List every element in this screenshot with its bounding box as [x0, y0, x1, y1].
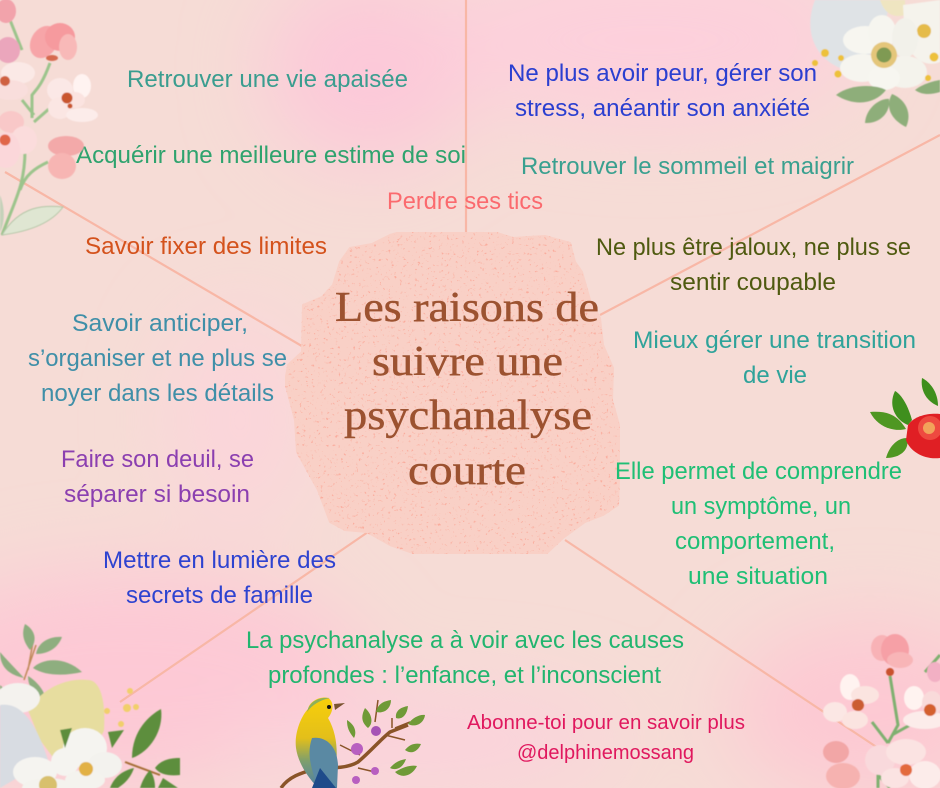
reason: deuil: séparer si besoin	[64, 481, 250, 508]
title: Les raisons de	[335, 285, 599, 331]
reason: comprendre un symptôme	[615, 458, 902, 590]
central speckled blob	[285, 232, 620, 554]
reason: sommeil: Retrouver le sommeil et maigrir	[521, 153, 854, 180]
reason: anticiper: noyer dans les détails	[41, 380, 274, 407]
icon: stones and white flowers top-right	[810, 0, 940, 127]
reason: secrets de famille	[103, 547, 336, 609]
reason: jalousie: sentir coupable	[670, 269, 836, 296]
reason: jalousie: Ne plus être jaloux, ne plus se	[596, 234, 911, 261]
reason: peur, stress, anxiété: Ne plus avoir peur, gérer son	[508, 60, 817, 87]
reason: causes profondes: La psychanalyse a à voir avec les causes	[246, 627, 684, 654]
reason: comprendre un symptôme: Elle permet de comprendre	[615, 458, 902, 485]
call to action: Abonne-toi pour en savoir plus	[467, 712, 745, 734]
reason: peur, stress, anxiété: stress, anéantir son anxiété	[515, 95, 810, 122]
reason: transition de vie: Mieux gérer une transition	[633, 327, 916, 354]
reason: limites: Savoir fixer des limites	[85, 233, 327, 260]
icon: pink blossoms top-left	[0, 0, 98, 235]
icon: stones and white flowers bottom-left	[0, 624, 180, 788]
title: psychanalyse	[344, 393, 592, 439]
icon: yellow bird on branch	[281, 697, 425, 788]
icon: red rose right	[870, 378, 940, 458]
reason: causes profondes: profondes : l’enfance, et l’inconscient	[268, 662, 661, 689]
icon: pink blossoms bottom-right	[823, 634, 940, 788]
call to action	[467, 712, 745, 764]
reason: secrets de famille: secrets de famille	[126, 582, 313, 609]
reason: estime de soi: Acquérir une meilleure estime de soi	[76, 142, 466, 169]
title	[335, 285, 599, 494]
reason: vie apaisée: Retrouver une vie apaisée	[127, 66, 408, 93]
reason: transition de vie: de vie	[743, 362, 807, 389]
reason: transition de vie	[633, 327, 916, 389]
reason: secrets de famille: Mettre en lumière des	[103, 547, 336, 574]
reason: deuil: Faire son deuil, se	[61, 446, 254, 473]
reason: anticiper: Savoir anticiper,	[72, 310, 248, 337]
reason: anticiper	[28, 310, 287, 407]
reason: comprendre un symptôme: une situation	[688, 563, 828, 590]
reason: peur, stress, anxiété	[508, 60, 817, 122]
title: suivre une	[372, 339, 563, 385]
reason: deuil	[61, 446, 254, 508]
call to action: @delphinemossang	[517, 742, 694, 764]
reason: causes profondes	[246, 627, 684, 689]
title: courte	[408, 448, 526, 494]
reason: comprendre un symptôme: comportement,	[675, 528, 835, 555]
reason: anticiper: s’organiser et ne plus se	[28, 345, 287, 372]
reason: jalousie	[596, 234, 911, 296]
reason: comprendre un symptôme: un symptôme, un	[671, 493, 851, 520]
reason: tics: Perdre ses tics	[387, 188, 543, 215]
